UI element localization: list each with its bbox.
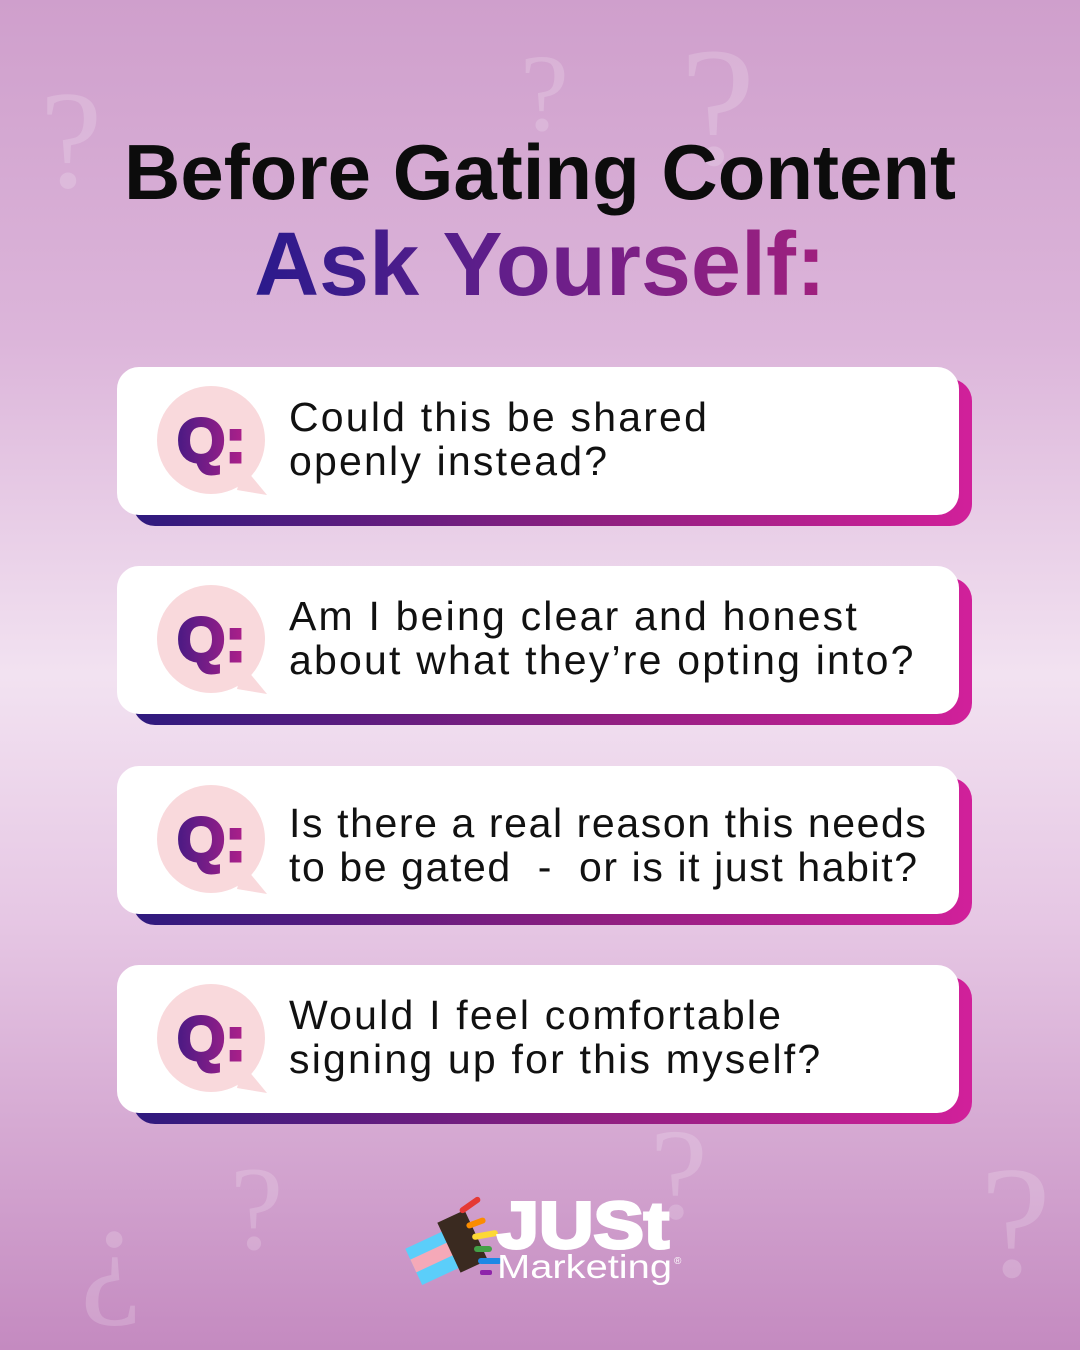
question text	[289, 800, 928, 890]
title: Before Gating Content	[124, 128, 956, 216]
icon: Q bubble: Q:	[177, 1005, 246, 1074]
card 2	[117, 566, 972, 725]
card 4	[117, 965, 972, 1124]
icon: Q bubble	[157, 984, 267, 1093]
question text	[289, 593, 916, 683]
icon: Q bubble	[157, 386, 267, 495]
background question marks: ?	[980, 1133, 1051, 1311]
logo	[405, 1190, 682, 1285]
background question marks: ?	[680, 13, 755, 201]
background question marks: ?	[650, 1103, 708, 1247]
subtitle: Ask Yourself:	[254, 215, 826, 315]
question text	[289, 394, 709, 484]
icon: Q bubble	[157, 785, 267, 894]
logo: JUSt	[497, 1190, 669, 1262]
icon: Q bubble: Q:	[177, 407, 246, 476]
card 1	[117, 367, 972, 526]
logo: ®	[674, 1256, 682, 1267]
question text: openly instead?	[289, 438, 609, 484]
icon: Q bubble: Q:	[177, 806, 246, 875]
logo: Marketing	[497, 1248, 672, 1285]
question text: Am I being clear and honest	[289, 593, 859, 639]
icon: Q bubble: Q:	[177, 606, 246, 675]
question text: signing up for this myself?	[289, 1036, 822, 1082]
card 3	[117, 766, 972, 925]
background question marks: ?	[40, 63, 102, 218]
icon: Q bubble	[157, 585, 267, 694]
background question marks: ¿	[80, 1173, 142, 1328]
question text	[289, 992, 822, 1082]
question text: to be gated - or is it just habit?	[289, 844, 919, 890]
question text: Is there a real reason this needs	[289, 800, 928, 846]
question text: about what they’re opting into?	[289, 637, 916, 683]
question text: Could this be shared	[289, 394, 709, 440]
background question marks: ?	[520, 32, 569, 154]
question text: Would I feel comfortable	[289, 992, 783, 1038]
background question marks: ?	[230, 1142, 283, 1275]
